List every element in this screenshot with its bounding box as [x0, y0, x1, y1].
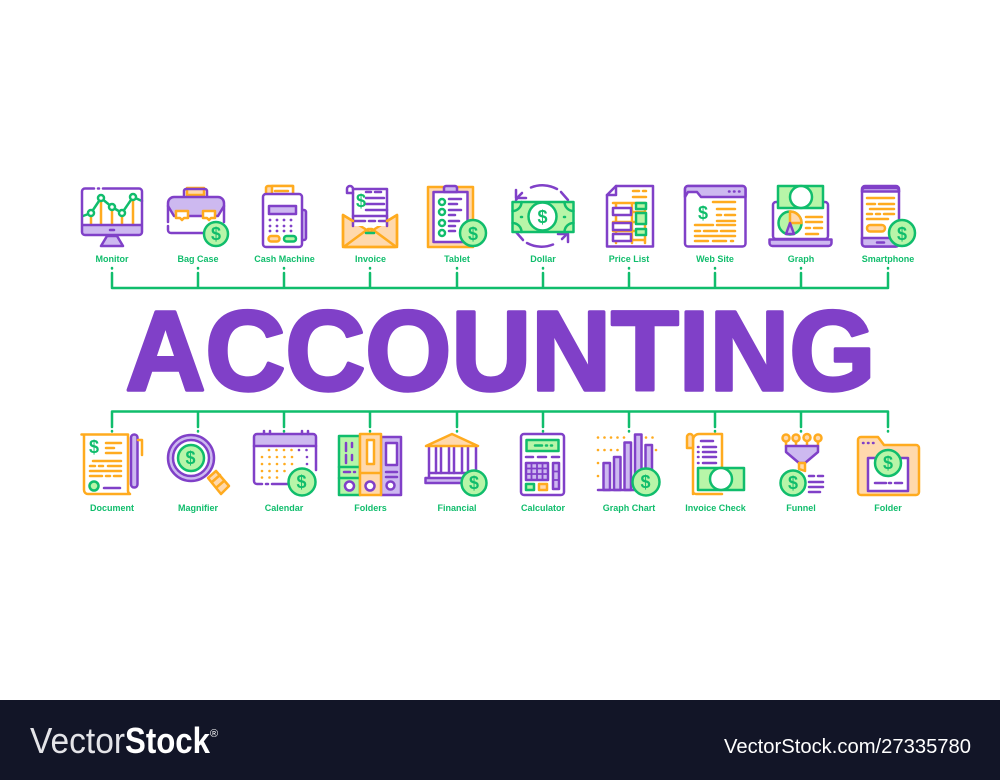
icon: web site	[685, 186, 746, 246]
footer bar	[0, 700, 1000, 780]
bottom labels: Calculator	[521, 503, 566, 513]
icon: document	[82, 434, 142, 494]
icon: invoice	[343, 186, 397, 247]
bottom labels: Magnifier	[178, 503, 218, 513]
icon: funnel	[780, 434, 823, 496]
icon: financial	[426, 434, 486, 496]
top labels: Price List	[609, 254, 649, 264]
icon: cash machine	[263, 186, 306, 247]
bottom labels: Folder	[874, 503, 902, 513]
top labels: Cash Machine	[254, 254, 315, 264]
icon: price list	[607, 186, 653, 246]
icon: calendar: $	[296, 472, 307, 492]
bottom labels	[90, 503, 902, 513]
icon: tablet	[428, 186, 486, 247]
bottom labels: Invoice Check	[685, 503, 747, 513]
icon: graph chart: $	[640, 472, 651, 492]
icon: invoice: $	[356, 191, 366, 211]
icon: calendar	[254, 431, 316, 496]
top labels: Graph	[788, 254, 814, 264]
top labels: Dollar	[530, 254, 556, 264]
bottom labels: Calendar	[265, 503, 304, 513]
top labels: Bag Case	[177, 254, 219, 264]
icon: dollar: $	[537, 207, 548, 227]
top labels: Web Site	[696, 254, 734, 264]
bottom connector bracket	[112, 412, 888, 432]
icon: monitor	[82, 188, 142, 246]
coin: $	[897, 224, 907, 244]
icon: graph chart	[598, 434, 660, 496]
footer logo: Vector: Vector	[30, 720, 125, 761]
bottom labels: Financial	[437, 503, 477, 513]
footer id: VectorStock.com/27335780	[724, 735, 971, 758]
registered mark: ®	[210, 728, 218, 740]
icon: calculator	[521, 434, 564, 495]
top labels: Tablet	[444, 254, 470, 264]
icon: folder: $	[883, 453, 893, 473]
footer logo: Stock: Stock	[125, 720, 211, 761]
icon: smartphone	[862, 186, 915, 246]
coin: $	[468, 224, 478, 244]
top connector bracket	[112, 268, 888, 288]
bottom labels: Funnel	[786, 503, 816, 513]
icon: dollar	[512, 185, 574, 247]
icon: document: $	[89, 437, 99, 457]
icon: magnifier	[168, 435, 229, 494]
icon: invoice check	[687, 434, 744, 494]
top labels	[96, 254, 914, 264]
icon: financial: $	[469, 473, 479, 493]
icon: bag case	[168, 188, 228, 246]
bottom labels: Graph Chart	[603, 503, 655, 513]
icon: magnifier: $	[185, 448, 196, 468]
icon: web site: $	[698, 203, 708, 223]
top labels: Smartphone	[862, 254, 914, 264]
coin: $	[211, 224, 221, 244]
top labels: Invoice	[355, 254, 386, 264]
icon: graph	[770, 186, 832, 246]
icon: folders	[339, 434, 401, 495]
top labels: Monitor	[96, 254, 129, 264]
title: ACCOUNTING	[126, 288, 876, 414]
icon: funnel: $	[788, 473, 798, 493]
icon: folder	[858, 437, 919, 495]
bottom labels: Folders	[354, 503, 387, 513]
bottom labels: Document	[90, 503, 134, 513]
